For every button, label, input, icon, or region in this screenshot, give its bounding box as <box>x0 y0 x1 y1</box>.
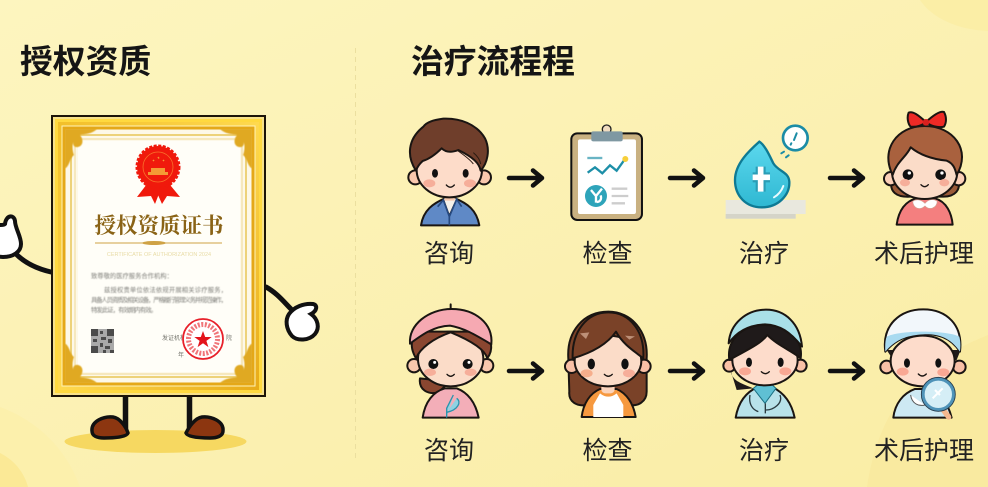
certificate signature text: 年 <box>178 351 184 359</box>
arrow <box>670 170 703 186</box>
label: 咨询: 咨询 <box>424 437 474 465</box>
avatar: boy in blue suit <box>408 119 491 225</box>
arrow <box>670 364 703 378</box>
certificate body text: 特发此证，有效期内有效。 <box>91 305 157 314</box>
mascot left arm and hand <box>0 216 51 272</box>
avatar: nurse in pink cap <box>407 304 493 418</box>
panel: certificate mascot <box>0 116 318 453</box>
certificate title: 授权资质证书 <box>94 214 224 238</box>
certificate frame <box>52 116 264 396</box>
certificate subtitle: CERTIFICATE OF AUTHORIZATION 2024 <box>107 252 211 258</box>
arrow <box>509 364 542 378</box>
certificate signature text: 院 <box>226 334 232 342</box>
label: 咨询: 咨询 <box>424 240 474 268</box>
arrow <box>830 364 863 378</box>
certificate body text: 兹授权贵单位依法依规开展相关诊疗服务， <box>104 285 227 294</box>
avatar: long-haired girl <box>565 312 651 417</box>
certificate title ornament <box>95 241 222 245</box>
avatar: girl with red bow <box>884 112 965 225</box>
avatar: doctor with magnifier <box>880 309 966 418</box>
heading: 授权资质: 授权资质 <box>20 43 151 80</box>
mascot right arm and hand <box>266 287 318 340</box>
certificate body text: 具备人员资质及相关设备，严格履行管理义务并规范操作， <box>91 295 227 304</box>
label: 检查: 检查 <box>582 437 633 465</box>
avatar: nurse in blue cap <box>723 310 807 418</box>
red stamp <box>183 319 223 359</box>
label: 术后护理: 术后护理 <box>874 437 974 465</box>
panel: treatment flow row 2 <box>407 304 974 465</box>
divider <box>354 48 356 462</box>
certificate corner ornaments <box>65 129 252 383</box>
mascot legs and shoes <box>92 396 223 438</box>
arrow <box>830 170 863 186</box>
red ribbon seal <box>137 146 180 204</box>
certificate body text <box>91 271 227 314</box>
icon: clipboard report <box>571 125 642 220</box>
certificate signature text: 发证机构 <box>162 334 186 342</box>
certificate signature text <box>162 334 232 359</box>
panel: treatment flow row 1 <box>408 112 974 268</box>
arrow <box>509 170 542 186</box>
icon: water drop <box>726 126 808 219</box>
label: 治疗: 治疗 <box>739 437 789 465</box>
label: 治疗: 治疗 <box>739 240 789 268</box>
heading: 治疗流程程: 治疗流程程 <box>411 43 575 80</box>
mascot shadow <box>64 430 246 453</box>
QR code <box>91 329 114 353</box>
label: 检查: 检查 <box>582 240 633 268</box>
certificate body text: 致尊敬的医疗服务合作机构： <box>91 271 173 280</box>
label: 术后护理: 术后护理 <box>874 240 974 268</box>
